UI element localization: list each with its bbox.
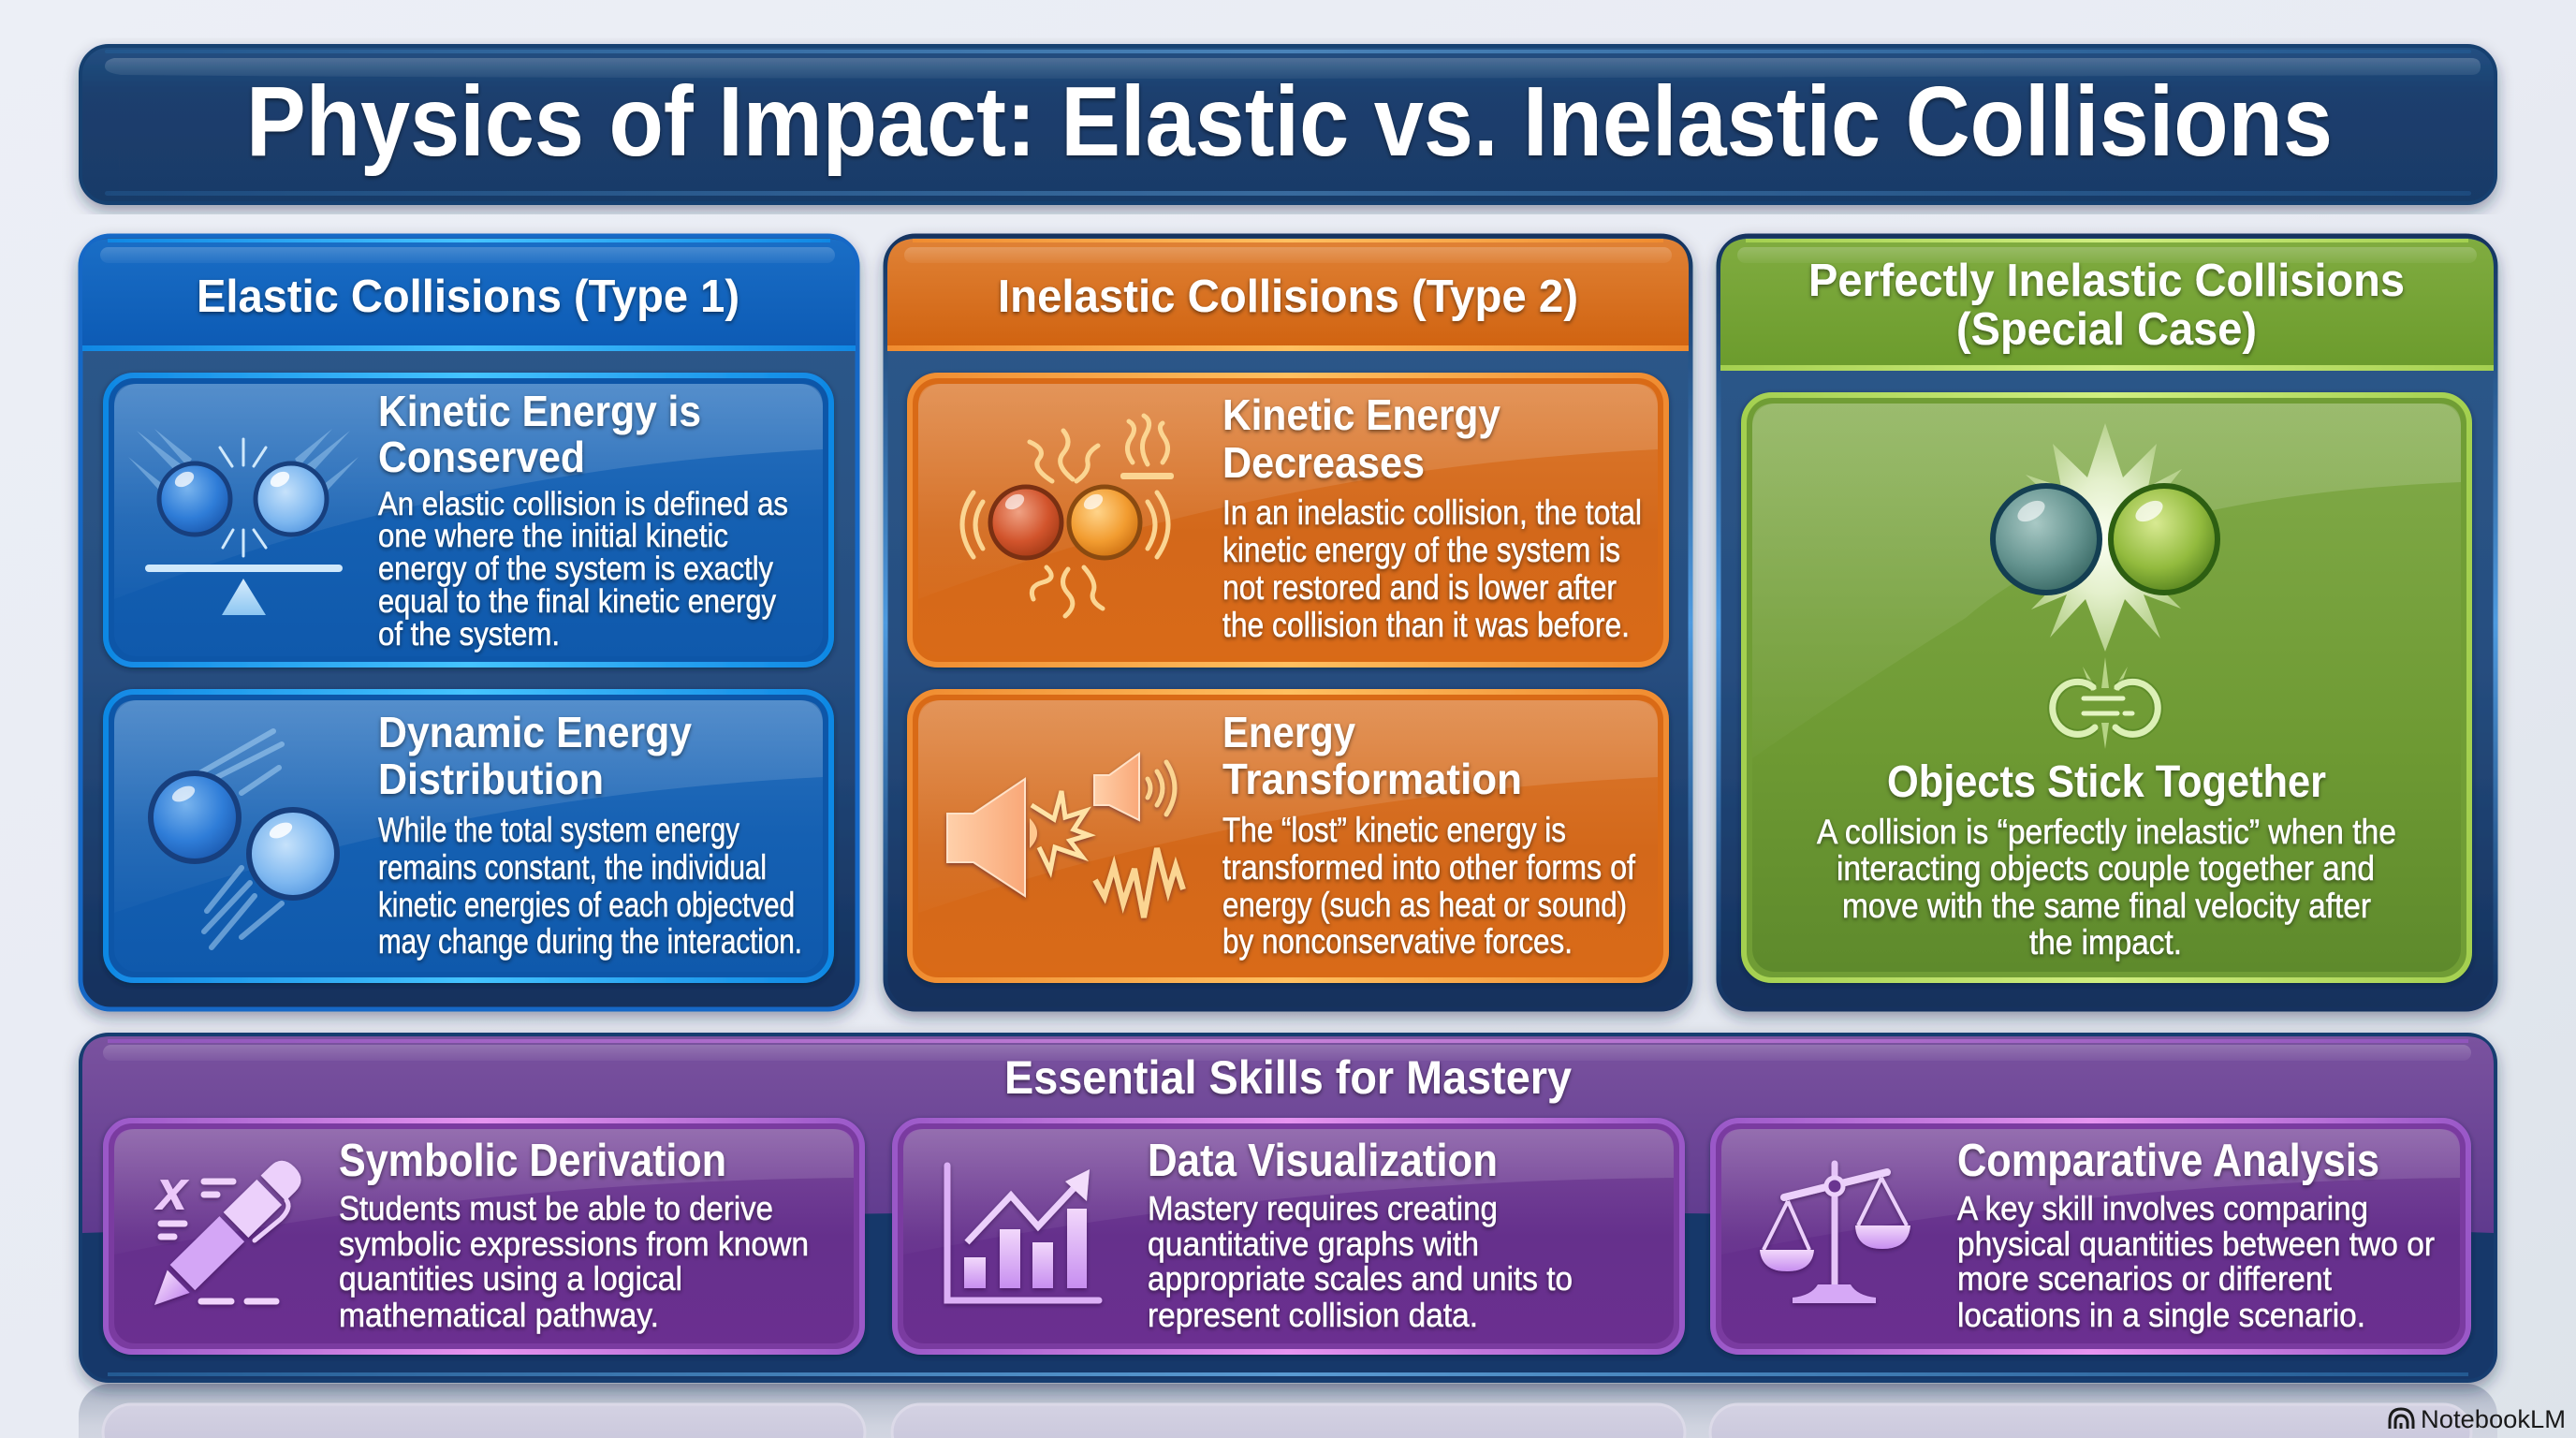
panel: perfectly inelastic collisions bbox=[1719, 236, 2496, 1009]
reflection below bottom panel bbox=[79, 1384, 2497, 1438]
text: kinetic energy is conserved: one where the initial kinetic bbox=[378, 518, 728, 554]
text: kinetic energy decreases: the collision than it was before. bbox=[1222, 606, 1630, 644]
text: comparative analysis: physical quantities between two or bbox=[1957, 1225, 2435, 1263]
text: kinetic energy is conserved: equal to the final kinetic energy bbox=[378, 583, 776, 620]
text: kinetic energy decreases bbox=[1222, 390, 1642, 644]
text: dynamic energy distribution: Distribution bbox=[378, 755, 604, 803]
text: energy transformation: Transformation bbox=[1222, 755, 1522, 803]
text: objects stick together: the impact. bbox=[2029, 923, 2182, 961]
text: kinetic energy is conserved: An elastic collision is defined as bbox=[378, 486, 788, 522]
text: data visualization: appropriate scales and units to bbox=[1148, 1259, 1573, 1298]
text: energy transformation: transformed into other forms of bbox=[1222, 848, 1636, 887]
text: energy transformation: by nonconservative forces. bbox=[1222, 922, 1573, 961]
inelastic header bar: Inelastic Collisions (Type 2) bbox=[998, 271, 1578, 322]
text: kinetic energy decreases: kinetic energy of the system is bbox=[1222, 531, 1620, 569]
icon: bar and line chart bbox=[947, 1166, 1099, 1300]
text: kinetic energy is conserved: Conserved bbox=[378, 433, 585, 481]
text: data visualization: Mastery requires creating bbox=[1148, 1189, 1498, 1227]
text: symbolic derivation bbox=[339, 1136, 809, 1334]
text: data visualization: represent collision data. bbox=[1148, 1296, 1478, 1334]
text: comparative analysis: A key skill involves comparing bbox=[1957, 1189, 2368, 1227]
text: kinetic energy is conserved: energy of the system is exactly bbox=[378, 550, 773, 587]
card: energy transformation bbox=[910, 692, 1666, 980]
text: symbolic derivation: symbolic expressions from known bbox=[339, 1225, 809, 1263]
text: objects stick together: move with the same final velocity after bbox=[1842, 887, 2371, 925]
icon: spheres in motion bbox=[151, 731, 337, 947]
text: kinetic energy is conserved bbox=[378, 387, 788, 653]
text: data visualization: quantitative graphs with bbox=[1148, 1225, 1479, 1263]
card: symbolic derivation bbox=[106, 1121, 862, 1352]
panel: elastic collisions bbox=[80, 236, 857, 1009]
text: dynamic energy distribution: remains constant, the individual bbox=[378, 848, 767, 887]
text: data visualization: Data Visualization bbox=[1148, 1136, 1498, 1186]
text: kinetic energy decreases: Kinetic Energy bbox=[1222, 390, 1500, 439]
icon: pen and equation bbox=[142, 1154, 307, 1318]
text: comparative analysis: locations in a single scenario. bbox=[1957, 1296, 2365, 1334]
icon: heat and vibration bbox=[962, 416, 1174, 616]
elastic header bar bbox=[82, 239, 856, 351]
text: dynamic energy distribution: kinetic energies of each objectved bbox=[378, 886, 795, 924]
text: kinetic energy decreases: Decreases bbox=[1222, 438, 1425, 487]
title text: Physics of Impact: Elastic vs. Inelastic Collisions bbox=[246, 66, 2333, 177]
card: kinetic energy decreases bbox=[910, 375, 1666, 665]
text: kinetic energy decreases: In an inelastic collision, the total bbox=[1222, 493, 1642, 532]
text: kinetic energy decreases: not restored and is lower after bbox=[1222, 568, 1617, 607]
skills heading: Essential Skills for Mastery bbox=[1004, 1051, 1572, 1104]
text: comparative analysis: Comparative Analysis bbox=[1957, 1136, 2379, 1186]
NotebookLM watermark: NotebookLM bbox=[2421, 1405, 2566, 1433]
text: dynamic energy distribution: may change during the interaction. bbox=[378, 922, 802, 961]
icon: colliding spheres bbox=[1993, 423, 2217, 652]
panel: inelastic collisions bbox=[886, 236, 1690, 1009]
text: comparative analysis bbox=[1957, 1136, 2435, 1334]
card: data visualization bbox=[895, 1121, 1682, 1352]
icon: sound and energy conversion bbox=[947, 754, 1183, 917]
inelastic header bar bbox=[887, 239, 1689, 351]
panel: essential skills bbox=[80, 1034, 2496, 1381]
title banner bbox=[80, 46, 2496, 203]
perfectly inelastic header bar: (Special Case) bbox=[1956, 304, 2257, 355]
text: objects stick together bbox=[1817, 757, 2396, 961]
icon: balance scale bbox=[1760, 1164, 1910, 1303]
perfectly inelastic header bar bbox=[1720, 239, 2494, 371]
icon: balanced collision bbox=[128, 429, 359, 615]
text: energy transformation bbox=[1222, 708, 1636, 961]
text: symbolic derivation: Students must be able to derive bbox=[339, 1189, 773, 1227]
text: kinetic energy is conserved: of the system. bbox=[378, 616, 560, 653]
text: energy transformation: Energy bbox=[1222, 708, 1355, 756]
card: comparative analysis bbox=[1713, 1121, 2468, 1352]
text: objects stick together: interacting objects couple together and bbox=[1837, 849, 2375, 888]
elastic header bar: Elastic Collisions (Type 1) bbox=[197, 271, 739, 322]
text: dynamic energy distribution: Dynamic Energy bbox=[378, 708, 692, 756]
text: symbolic derivation: mathematical pathway. bbox=[339, 1296, 659, 1334]
text: data visualization bbox=[1148, 1136, 1573, 1334]
text: energy transformation: energy (such as heat or sound) bbox=[1222, 886, 1627, 924]
text: dynamic energy distribution bbox=[378, 708, 802, 961]
icon: coupling link bbox=[2053, 657, 2158, 749]
text: symbolic derivation: Symbolic Derivation bbox=[339, 1136, 726, 1186]
text: dynamic energy distribution: While the total system energy bbox=[378, 811, 739, 849]
icon: pen and equation: x bbox=[154, 1159, 190, 1222]
card: kinetic energy is conserved bbox=[106, 375, 831, 665]
text: symbolic derivation: quantities using a logical bbox=[339, 1259, 682, 1298]
text: kinetic energy is conserved: Kinetic Energy is bbox=[378, 387, 701, 435]
card: dynamic energy distribution bbox=[106, 692, 831, 980]
text: objects stick together: Objects Stick Together bbox=[1887, 757, 2326, 807]
text: comparative analysis: more scenarios or different bbox=[1957, 1259, 2332, 1298]
text: objects stick together: A collision is “perfectly inelastic” when the bbox=[1817, 813, 2396, 851]
text: energy transformation: The “lost” kinetic energy is bbox=[1222, 811, 1566, 849]
perfectly inelastic header bar: Perfectly Inelastic Collisions bbox=[1808, 256, 2405, 306]
card: objects stick together bbox=[1744, 395, 2469, 980]
